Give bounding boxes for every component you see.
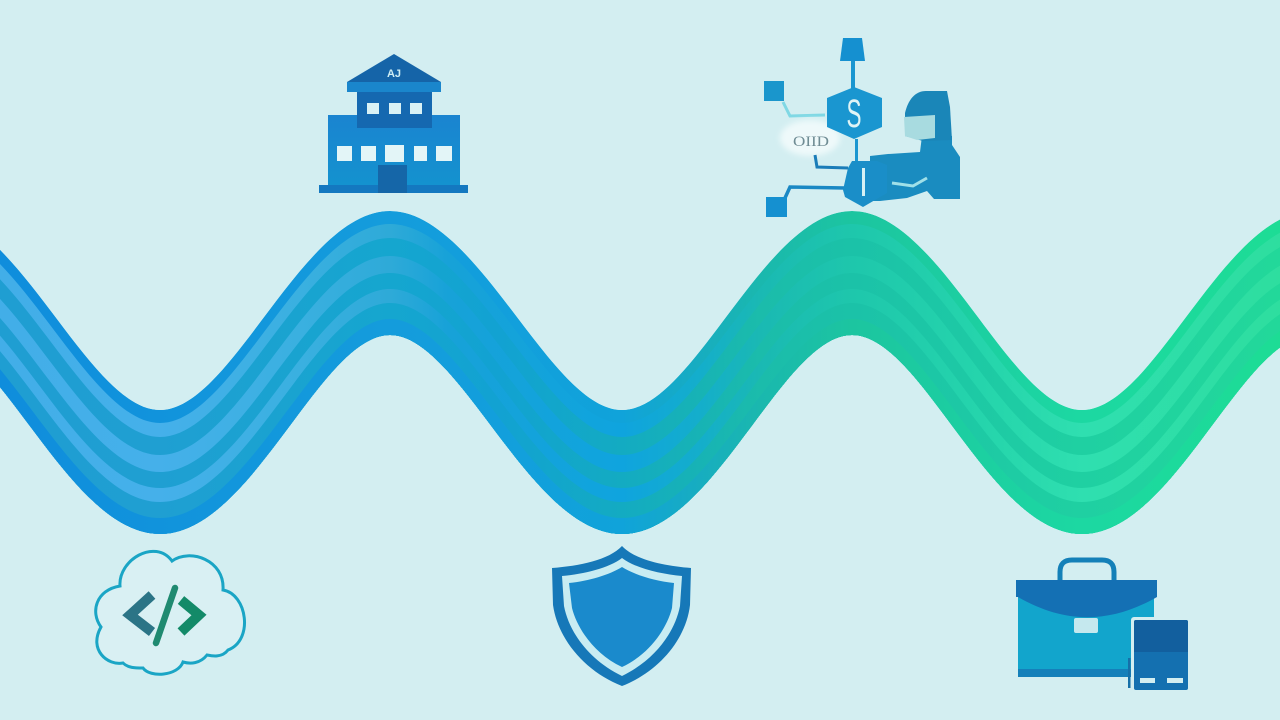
- icon: building: AJ: [387, 68, 401, 80]
- icon: shield: [552, 546, 691, 686]
- icon: network and person: S: [846, 92, 862, 136]
- icon: building: [319, 54, 468, 193]
- striped wave ribbon: [0, 211, 1280, 534]
- icon: code cloud: [96, 551, 245, 674]
- icon: network and person: [764, 38, 960, 217]
- icon: briefcase and tablet: [1016, 560, 1191, 693]
- icon: network and person: OIID: [793, 134, 829, 150]
